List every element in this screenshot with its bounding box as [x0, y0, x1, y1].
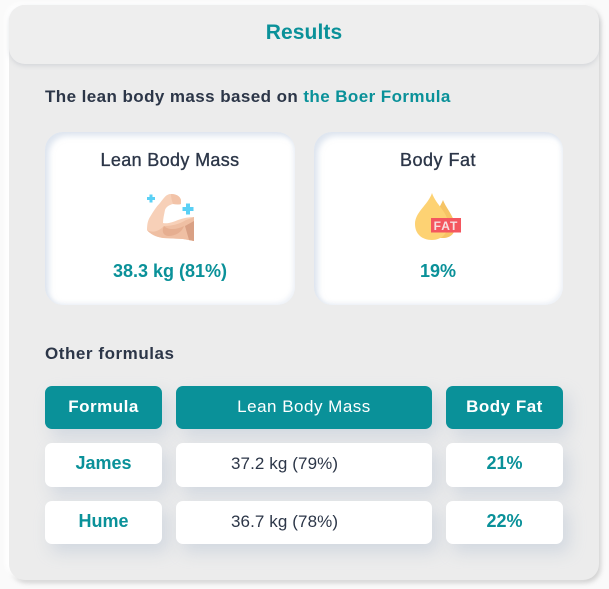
- intro sentence: The lean body mass based on the Boer Formula: [45, 87, 451, 106]
- row: james lean body mass: [176, 443, 432, 487]
- column header: lean body mass: Lean Body Mass: [237, 397, 371, 416]
- icon: fat drops: FAT: [434, 219, 458, 233]
- row: hume body fat: 22%: [486, 511, 523, 531]
- column header: formula: Formula: [68, 397, 139, 416]
- column header: body fat: [446, 386, 563, 429]
- row: hume name: [45, 501, 162, 544]
- card heading: Lean Body Mass: [101, 150, 239, 170]
- row: hume body fat: [446, 501, 563, 544]
- icon: fat drops: [415, 193, 461, 240]
- row: james body fat: 21%: [486, 453, 523, 473]
- row: james body fat: [446, 443, 563, 487]
- column header: formula: [45, 386, 162, 429]
- lean body mass value: 38.3 kg (81%): [113, 261, 227, 281]
- row: hume lean body mass: [176, 501, 432, 544]
- icon: flexed arm: [147, 194, 194, 241]
- row: james lean body mass: 37.2 kg (79%): [231, 454, 338, 473]
- body fat value: 19%: [420, 261, 456, 281]
- panel: lean body mass card: [45, 132, 295, 305]
- column header: lean body mass: [176, 386, 432, 429]
- row: hume lean body mass: 36.7 kg (78%): [231, 512, 338, 531]
- other formulas heading: Other formulas: [45, 344, 175, 363]
- column header: body fat: Body Fat: [466, 397, 543, 416]
- title: Results: [266, 21, 342, 44]
- card heading: Body Fat: [400, 150, 476, 170]
- row: james name: [45, 443, 162, 487]
- row: hume name: Hume: [78, 511, 128, 531]
- header bar: [9, 5, 599, 64]
- row: james name: James: [75, 453, 132, 473]
- panel: body fat card: [314, 132, 563, 305]
